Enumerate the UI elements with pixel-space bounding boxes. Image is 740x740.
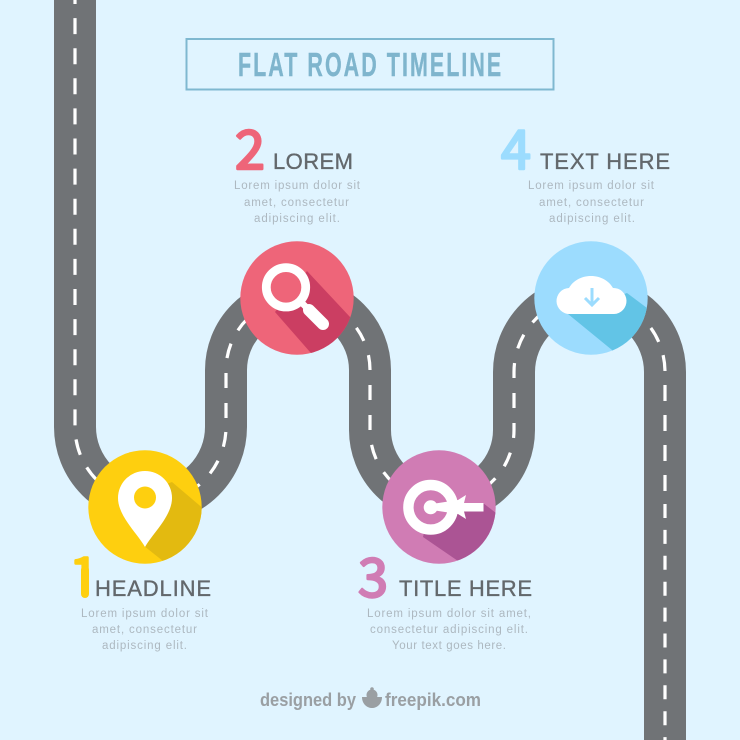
step 4 text: Lorem ipsum dolor sit	[528, 180, 655, 192]
step 4 text	[501, 106, 670, 225]
step 4 text: adipiscing elit.	[549, 213, 635, 225]
step 4 text: 4	[501, 106, 531, 185]
title box: FLAT ROAD TIMELINE	[238, 46, 501, 83]
footer credit	[260, 687, 481, 710]
footer credit: designed by	[260, 690, 356, 710]
step 3 text: Lorem ipsum dolor sit amet,	[367, 608, 531, 620]
winding road	[75, 0, 665, 740]
step 2 marker: magnifying glass	[240, 241, 360, 360]
step 1 text	[74, 556, 210, 652]
step 3 text: Your text goes here.	[392, 640, 506, 652]
step 4 text: TEXT HERE	[540, 149, 670, 174]
step 4 text: amet, consectetur	[539, 197, 644, 209]
step 4 marker: cloud download	[534, 241, 648, 355]
title box	[186, 39, 554, 90]
step 3 text	[358, 534, 532, 652]
step 2 text: Lorem ipsum dolor sit	[234, 180, 361, 192]
step 3 text: consectetur adipiscing elit.	[370, 624, 528, 636]
step 2 text: 2	[235, 106, 265, 185]
step 1 text: adipiscing elit.	[102, 640, 187, 652]
step 1 text: HEADLINE	[95, 576, 211, 601]
step 3 text: 3	[358, 534, 388, 613]
step 2 text: amet, consectetur	[244, 197, 349, 209]
step 2 text: LOREM	[273, 149, 353, 174]
step 3 text: TITLE HERE	[399, 576, 532, 601]
step 1 text: Lorem ipsum dolor sit	[81, 608, 209, 620]
footer credit: freepik.com	[385, 690, 481, 710]
step 1 text: amet, consectetur	[92, 624, 197, 636]
step 1 marker: location pin	[88, 450, 202, 564]
step 2 text: adipiscing elit.	[254, 213, 340, 225]
step 3 marker: target with arrow	[382, 450, 496, 564]
step 1 text: 1	[69, 533, 99, 612]
step 2 text	[234, 106, 361, 225]
